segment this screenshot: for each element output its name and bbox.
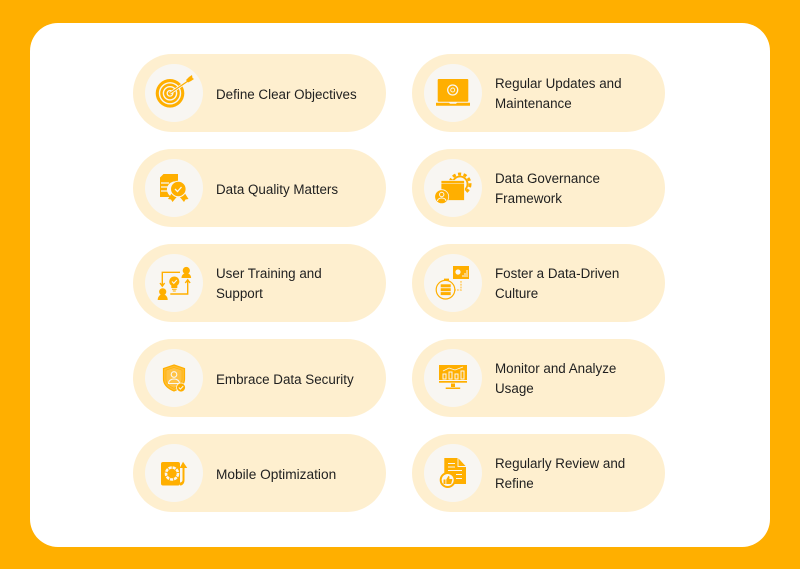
label: Usage <box>495 381 534 396</box>
label: Refine <box>495 476 534 491</box>
icon: laptop with gear <box>424 64 482 122</box>
label: Mobile Optimization <box>216 467 336 482</box>
label <box>495 361 616 396</box>
panel: Data Governance Framework <box>412 149 665 227</box>
label: Culture <box>495 286 538 301</box>
label: Data Quality Matters <box>216 182 338 197</box>
panel: Monitor and Analyze Usage <box>412 339 665 417</box>
label: Define Clear Objectives <box>216 87 357 102</box>
icon: target with arrow <box>145 64 203 122</box>
icon: document with thumbs up <box>424 444 482 502</box>
label: User Training and <box>216 266 322 281</box>
icon: users, lightbulb and arrows <box>145 254 203 312</box>
icon: folder with gear and user <box>424 159 482 217</box>
panel: Mobile Optimization <box>133 434 386 512</box>
label <box>495 456 625 491</box>
label <box>495 76 622 111</box>
label <box>495 171 600 206</box>
panel: Define Clear Objectives <box>133 54 386 132</box>
icon: shield with user <box>145 349 203 407</box>
label: Framework <box>495 191 562 206</box>
icon: phone with gear and up arrow <box>145 444 203 502</box>
label <box>495 266 619 301</box>
panel: Data Quality Matters <box>133 149 386 227</box>
panel: Foster a Data-Driven Culture <box>412 244 665 322</box>
label: Monitor and Analyze <box>495 361 616 376</box>
panel: User Training and Support <box>133 244 386 322</box>
label <box>216 266 322 301</box>
icon: document with award badge <box>145 159 203 217</box>
panel: Embrace Data Security <box>133 339 386 417</box>
panel: Regularly Review and Refine <box>412 434 665 512</box>
label: Regularly Review and <box>495 456 625 471</box>
icon: server cycle with chart panel <box>424 254 482 312</box>
icon: monitor with bar chart <box>424 349 482 407</box>
label: Regular Updates and <box>495 76 622 91</box>
panel: Regular Updates and Maintenance <box>412 54 665 132</box>
label: Maintenance <box>495 96 572 111</box>
label: Data Governance <box>495 171 600 186</box>
label: Foster a Data-Driven <box>495 266 619 281</box>
label: Support <box>216 286 263 301</box>
label: Embrace Data Security <box>216 372 354 387</box>
